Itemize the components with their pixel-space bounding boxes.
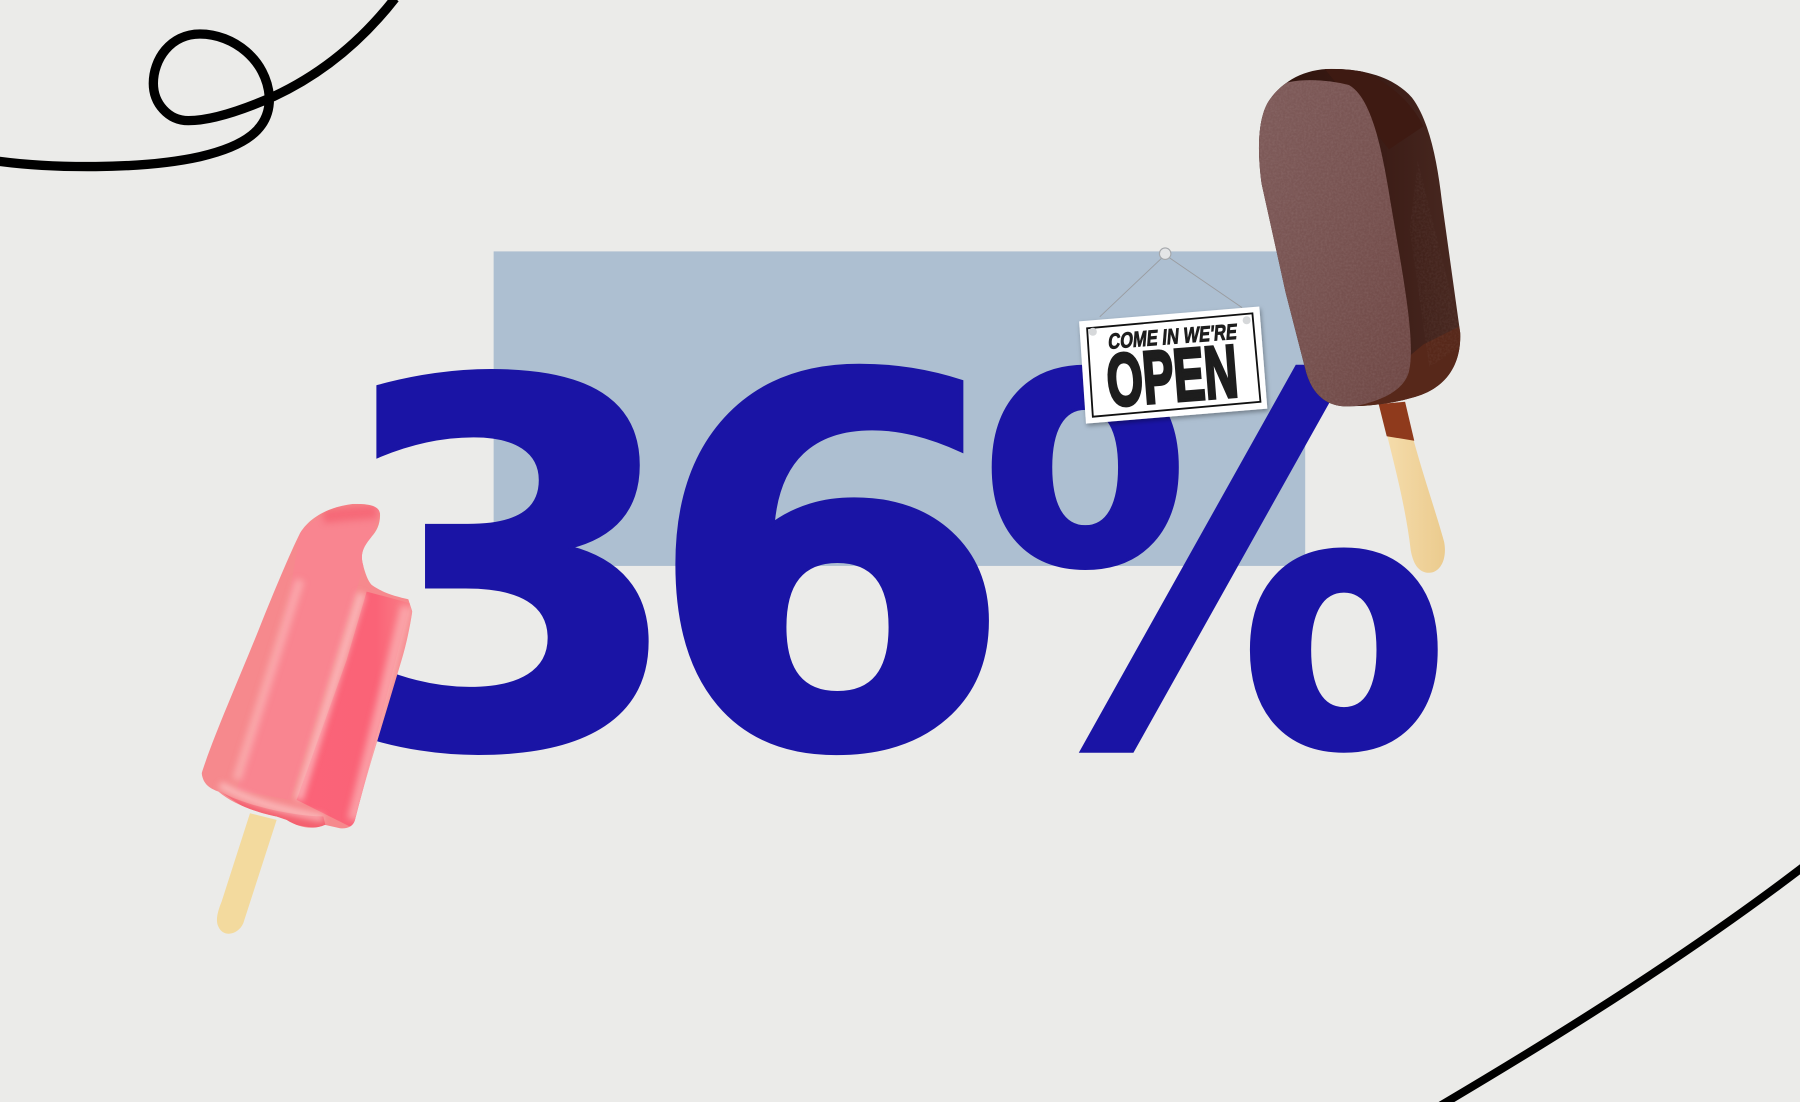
choc stick [1379, 402, 1445, 573]
chocolate ice cream bar [1258, 68, 1460, 573]
big figure: 36% [327, 269, 1451, 868]
open sign [1079, 248, 1267, 424]
decorative curve: bottom right [1441, 863, 1800, 1102]
decorative scribble: top left loop [0, 0, 395, 167]
sign text: open: OPEN [1104, 330, 1241, 423]
pink stick [217, 813, 277, 934]
big figure: 36%: 6 [644, 269, 1016, 868]
pink popsicle [197, 500, 417, 934]
pink body [197, 500, 417, 833]
choc body [1258, 68, 1460, 406]
big figure: 36%: % [978, 272, 1451, 864]
sign text: come in: COME IN WE'RE [1107, 320, 1238, 355]
blue-grey rectangle behind figure [494, 251, 1305, 566]
big figure: 36%: 3 [327, 276, 688, 866]
